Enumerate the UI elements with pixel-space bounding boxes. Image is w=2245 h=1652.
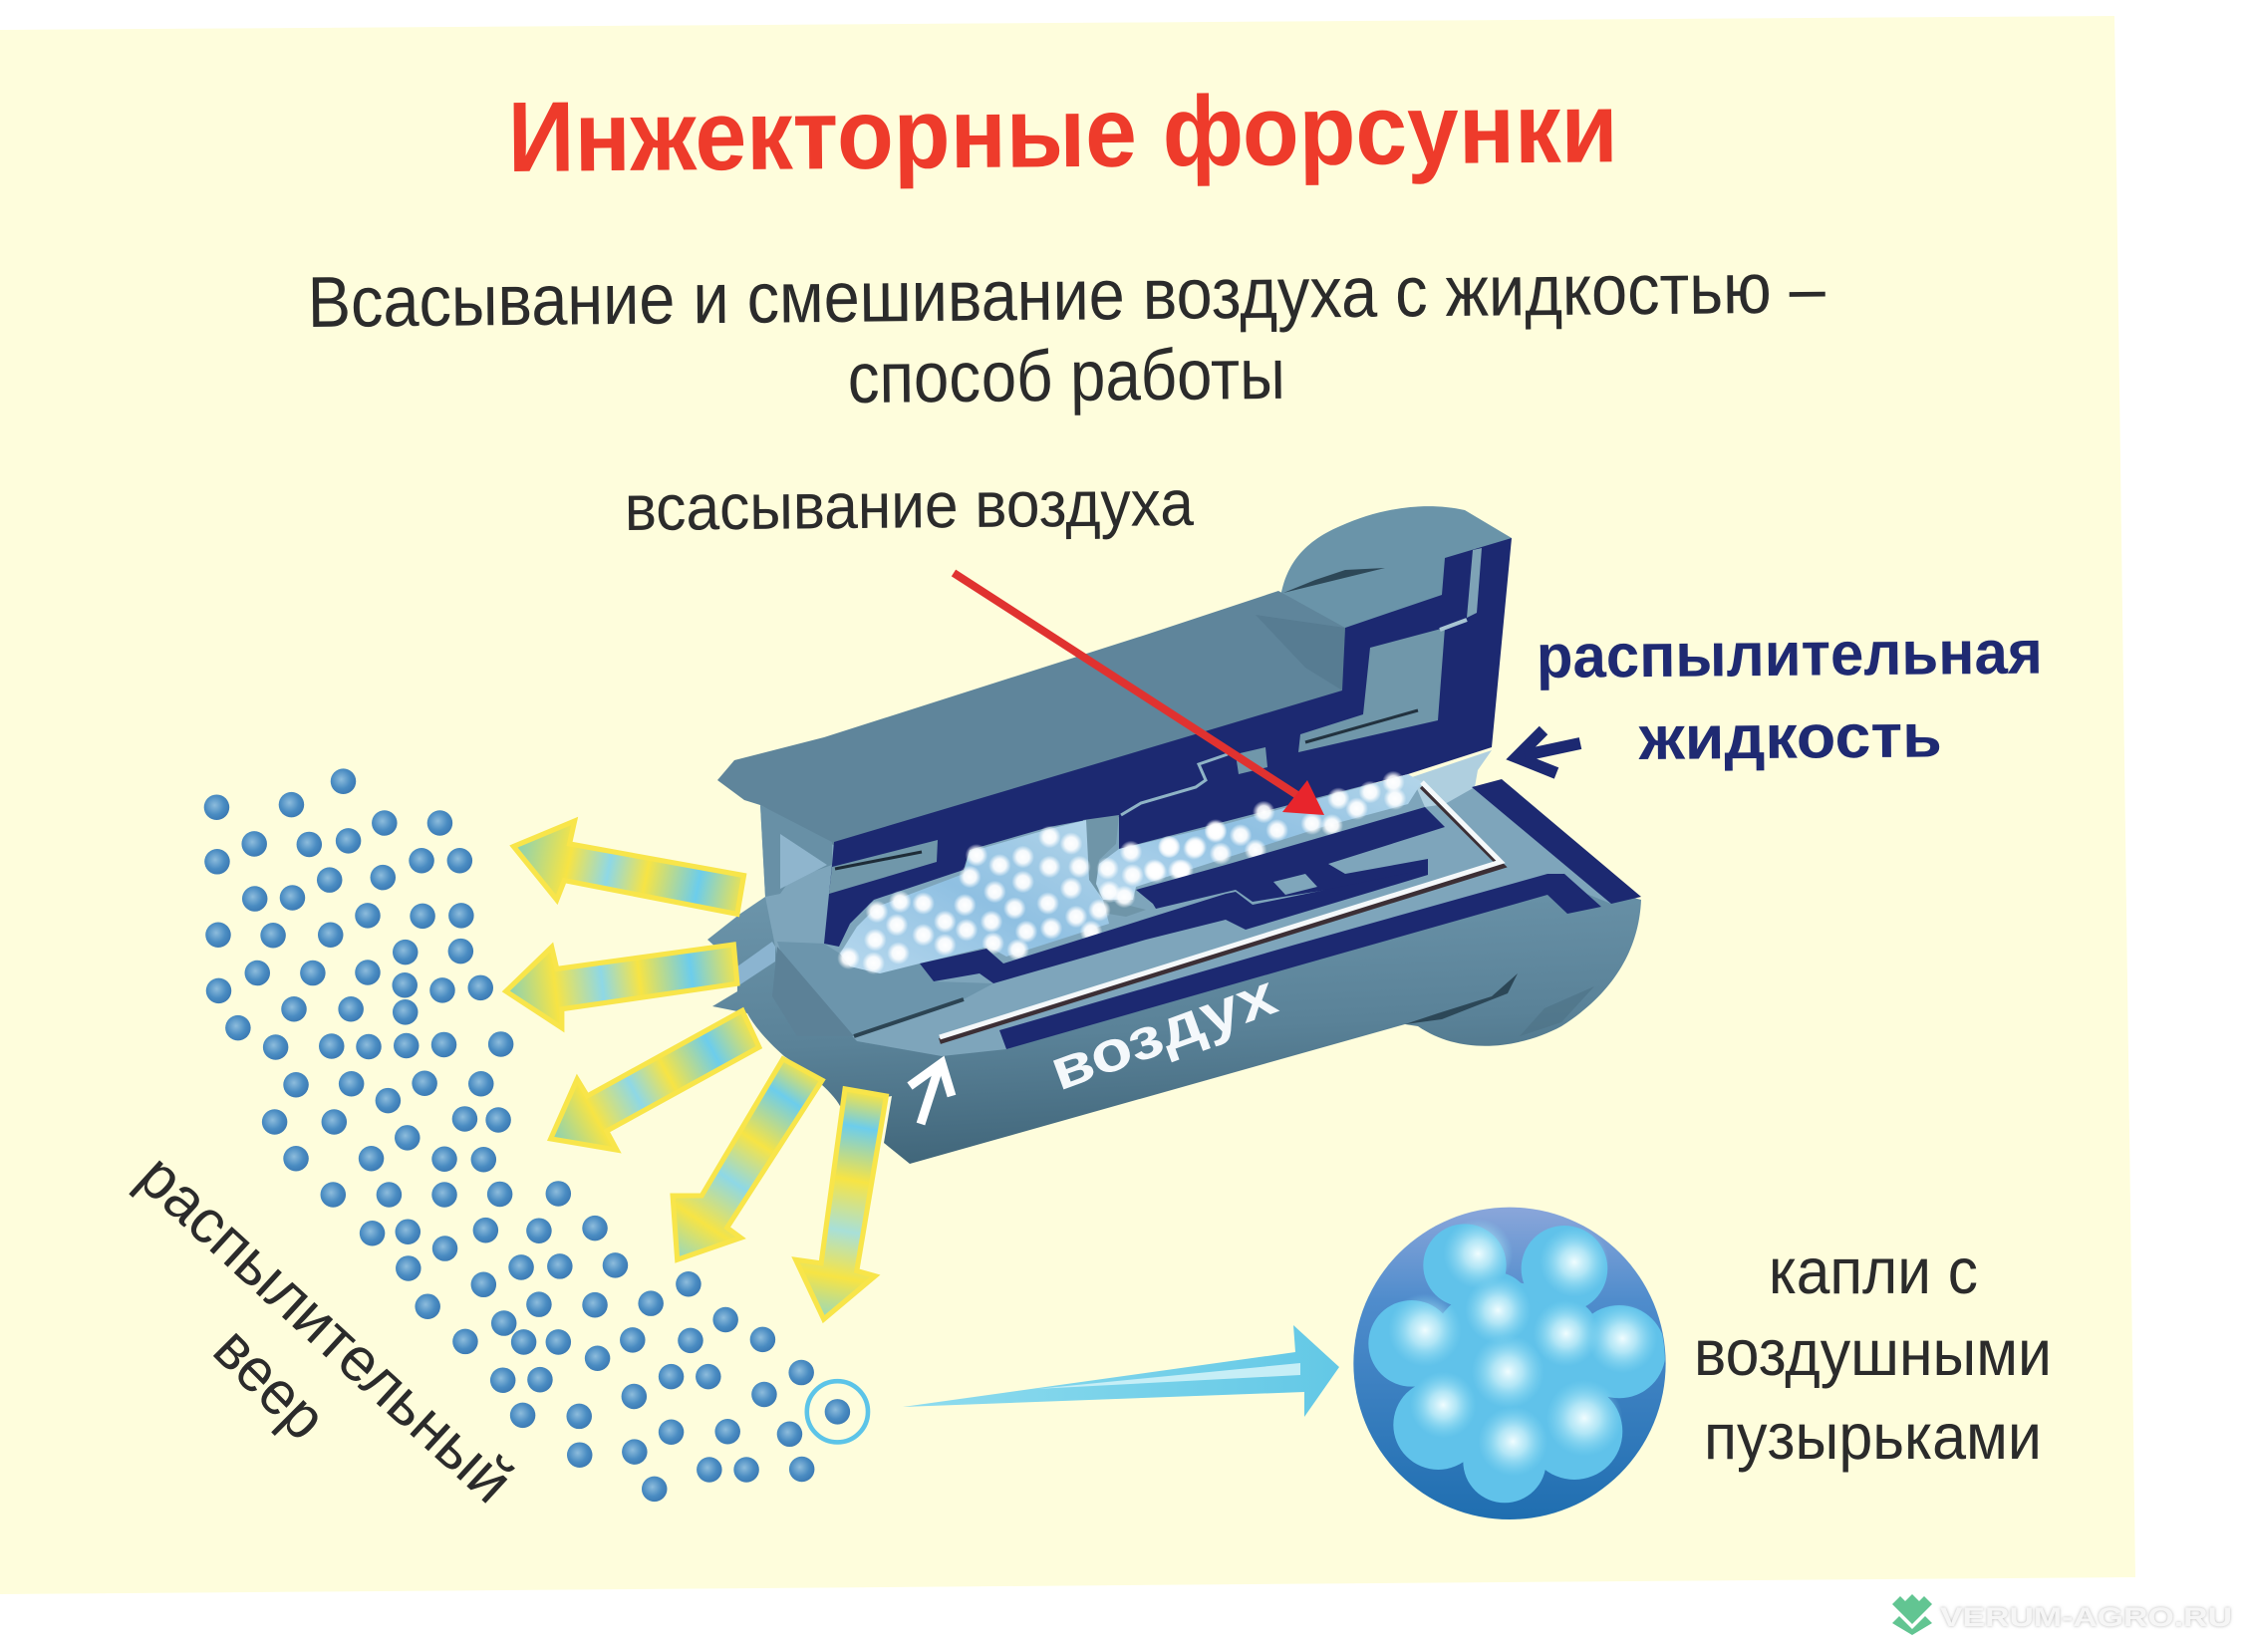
lower barrel and nose <box>707 874 1641 1164</box>
connector insert <box>1236 747 1267 774</box>
rear flange <box>1280 506 1512 697</box>
navy inner island <box>1136 807 1445 909</box>
subtitle: способ работы <box>847 335 1285 418</box>
label: air: воздух <box>1041 962 1284 1103</box>
air cavity right <box>1096 774 1422 900</box>
label: droplets with air bubbles: воздушными <box>1694 1316 2052 1389</box>
label: air suction: всасывание воздуха <box>624 466 1195 544</box>
label: droplets with air bubbles: капли с <box>1769 1235 1978 1307</box>
subtitle <box>307 248 1826 418</box>
label: spray fan: распылительный <box>126 1141 526 1516</box>
block shaded face <box>772 947 854 1036</box>
gap in wall <box>1467 548 1482 618</box>
light trace <box>1121 754 1228 815</box>
air cavity left <box>840 820 1109 973</box>
flange shading <box>1520 986 1594 1036</box>
light line in wall <box>1440 620 1467 630</box>
droplet with air bubbles <box>1353 1208 1666 1519</box>
navy right wall <box>1472 779 1641 904</box>
light inner facet <box>780 834 827 889</box>
label: droplets with air bubbles <box>1694 1235 2052 1473</box>
darker slab shoulder <box>1256 615 1345 690</box>
title: Инжекторные форсунки <box>507 72 1618 193</box>
nose light facet <box>737 942 775 986</box>
interior backdrop <box>760 777 1611 1056</box>
navy cut wall <box>824 538 1512 947</box>
spray arrows and droplets <box>204 768 886 1502</box>
lower left block <box>777 942 993 1036</box>
air path line <box>940 782 1501 1037</box>
red suction arrow <box>954 573 1324 815</box>
cyan pointer arrow <box>903 1325 1339 1417</box>
droplets <box>204 768 850 1502</box>
label: spray liquid <box>1537 619 2043 773</box>
navy liquid arrow <box>1517 730 1580 773</box>
subtitle: Всасывание и смешивание воздуха с жидкостью – <box>307 248 1826 343</box>
barrel shading <box>1405 973 1518 1024</box>
label: spray fan: веер <box>200 1314 339 1453</box>
groove <box>854 999 964 1036</box>
nozzle cross-section <box>707 506 1641 1164</box>
navy lower wall <box>999 874 1601 1049</box>
icon: watermark leaf <box>1892 1594 1932 1635</box>
air path line shadow <box>940 786 1502 1041</box>
label: spray liquid: жидкость <box>1637 701 1942 773</box>
white air-in arrow <box>910 1063 952 1124</box>
highlighted droplet ring <box>807 1381 868 1442</box>
watermark text: VERUM-AGRO.RU <box>1940 1602 2232 1632</box>
slot dark line <box>835 852 922 869</box>
bubble cluster <box>1368 1219 1666 1503</box>
label: spray liquid: распылительная <box>1537 619 2043 691</box>
upper slab <box>717 591 1345 847</box>
gray ring <box>1083 815 1146 917</box>
flange dark slot <box>1283 568 1385 593</box>
slot in left wall <box>829 840 938 894</box>
fan arrows <box>506 821 886 1319</box>
wall pocket <box>1298 628 1445 752</box>
label: droplets with air bubbles: пузырьками <box>1704 1400 2042 1473</box>
island insert <box>1273 874 1317 895</box>
watermark <box>1892 1594 2232 1635</box>
pocket slot <box>1305 710 1418 742</box>
inlet light area <box>1412 750 1492 807</box>
air bubbles <box>837 771 1406 974</box>
navy lower inner band <box>920 869 1428 983</box>
side wall <box>760 805 832 897</box>
